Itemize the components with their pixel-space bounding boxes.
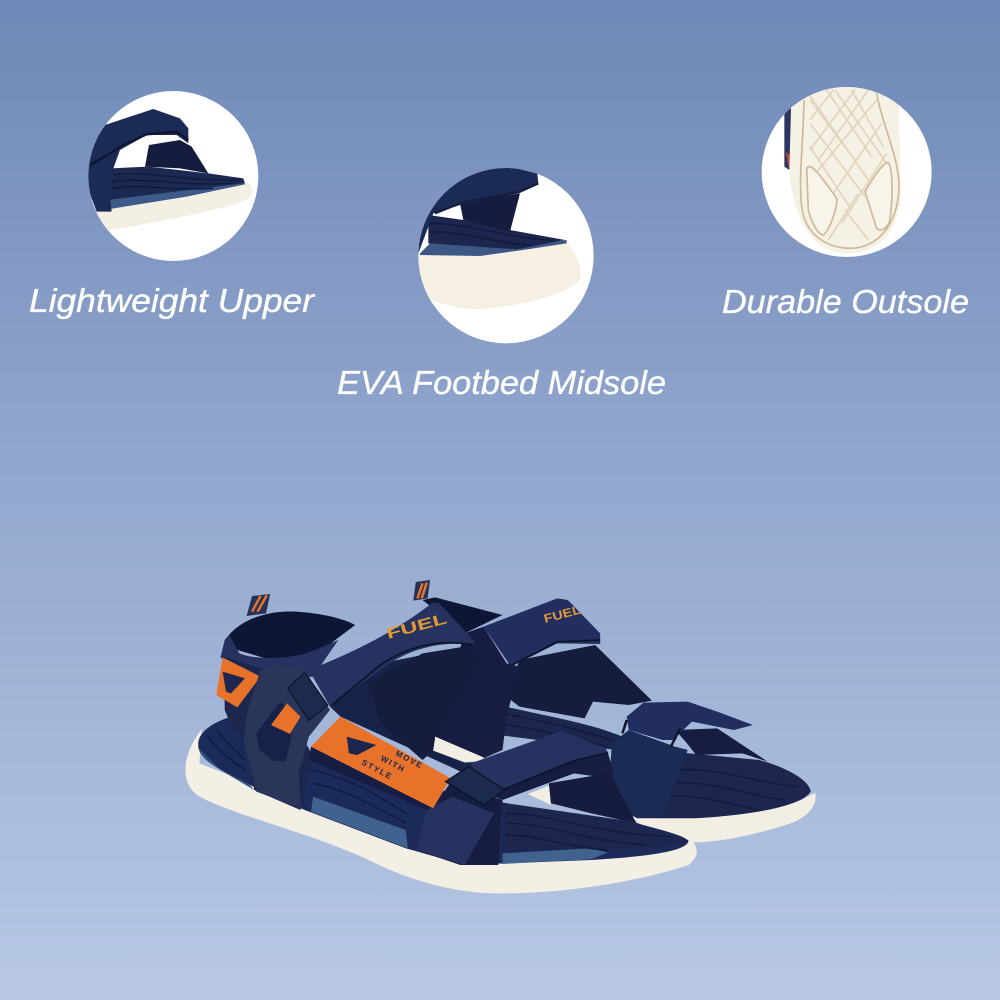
icon: F logo rear (223, 672, 245, 693)
buckle rear (288, 673, 328, 721)
heel collar (229, 611, 355, 660)
label: Durable Outsole: Durable Outsole (722, 283, 969, 320)
footbed (198, 717, 689, 865)
side clip panel (244, 665, 330, 808)
inner lining base (322, 647, 484, 773)
heel tab (247, 594, 270, 616)
white outsole (185, 729, 697, 893)
text: MOVE WITH STYLE (360, 749, 425, 782)
front strap lower body (309, 747, 503, 865)
text: MOVE WITH STYLE: WITH (379, 754, 407, 774)
orange band rear (216, 657, 260, 707)
sandal pair product image (185, 580, 816, 893)
front buckle (446, 767, 505, 805)
icon: F logo front (347, 737, 376, 755)
inner lining (368, 647, 481, 760)
label: Lightweight Upper: Lightweight Upper (29, 282, 316, 319)
back sandal (413, 580, 816, 843)
icon: durable outsole detail circle (762, 85, 932, 257)
text: FUEL logo back: FUEL (542, 603, 582, 626)
orange band front (311, 717, 451, 808)
front velcro strap (471, 731, 609, 793)
side strap (309, 602, 474, 707)
window in clip panel (256, 702, 295, 762)
label: EVA Footbed Midsole: EVA Footbed Midsole (337, 364, 666, 401)
front sandal (185, 594, 697, 893)
icon: EVA footbed midsole detail circle (417, 167, 594, 343)
icon: lightweight upper detail circle (87, 91, 258, 261)
orange band window (271, 703, 300, 734)
text: MOVE WITH STYLE: MOVE (394, 749, 425, 771)
text: MOVE WITH STYLE: STYLE (360, 758, 394, 782)
text: FUEL logo front: FUEL (385, 610, 449, 643)
